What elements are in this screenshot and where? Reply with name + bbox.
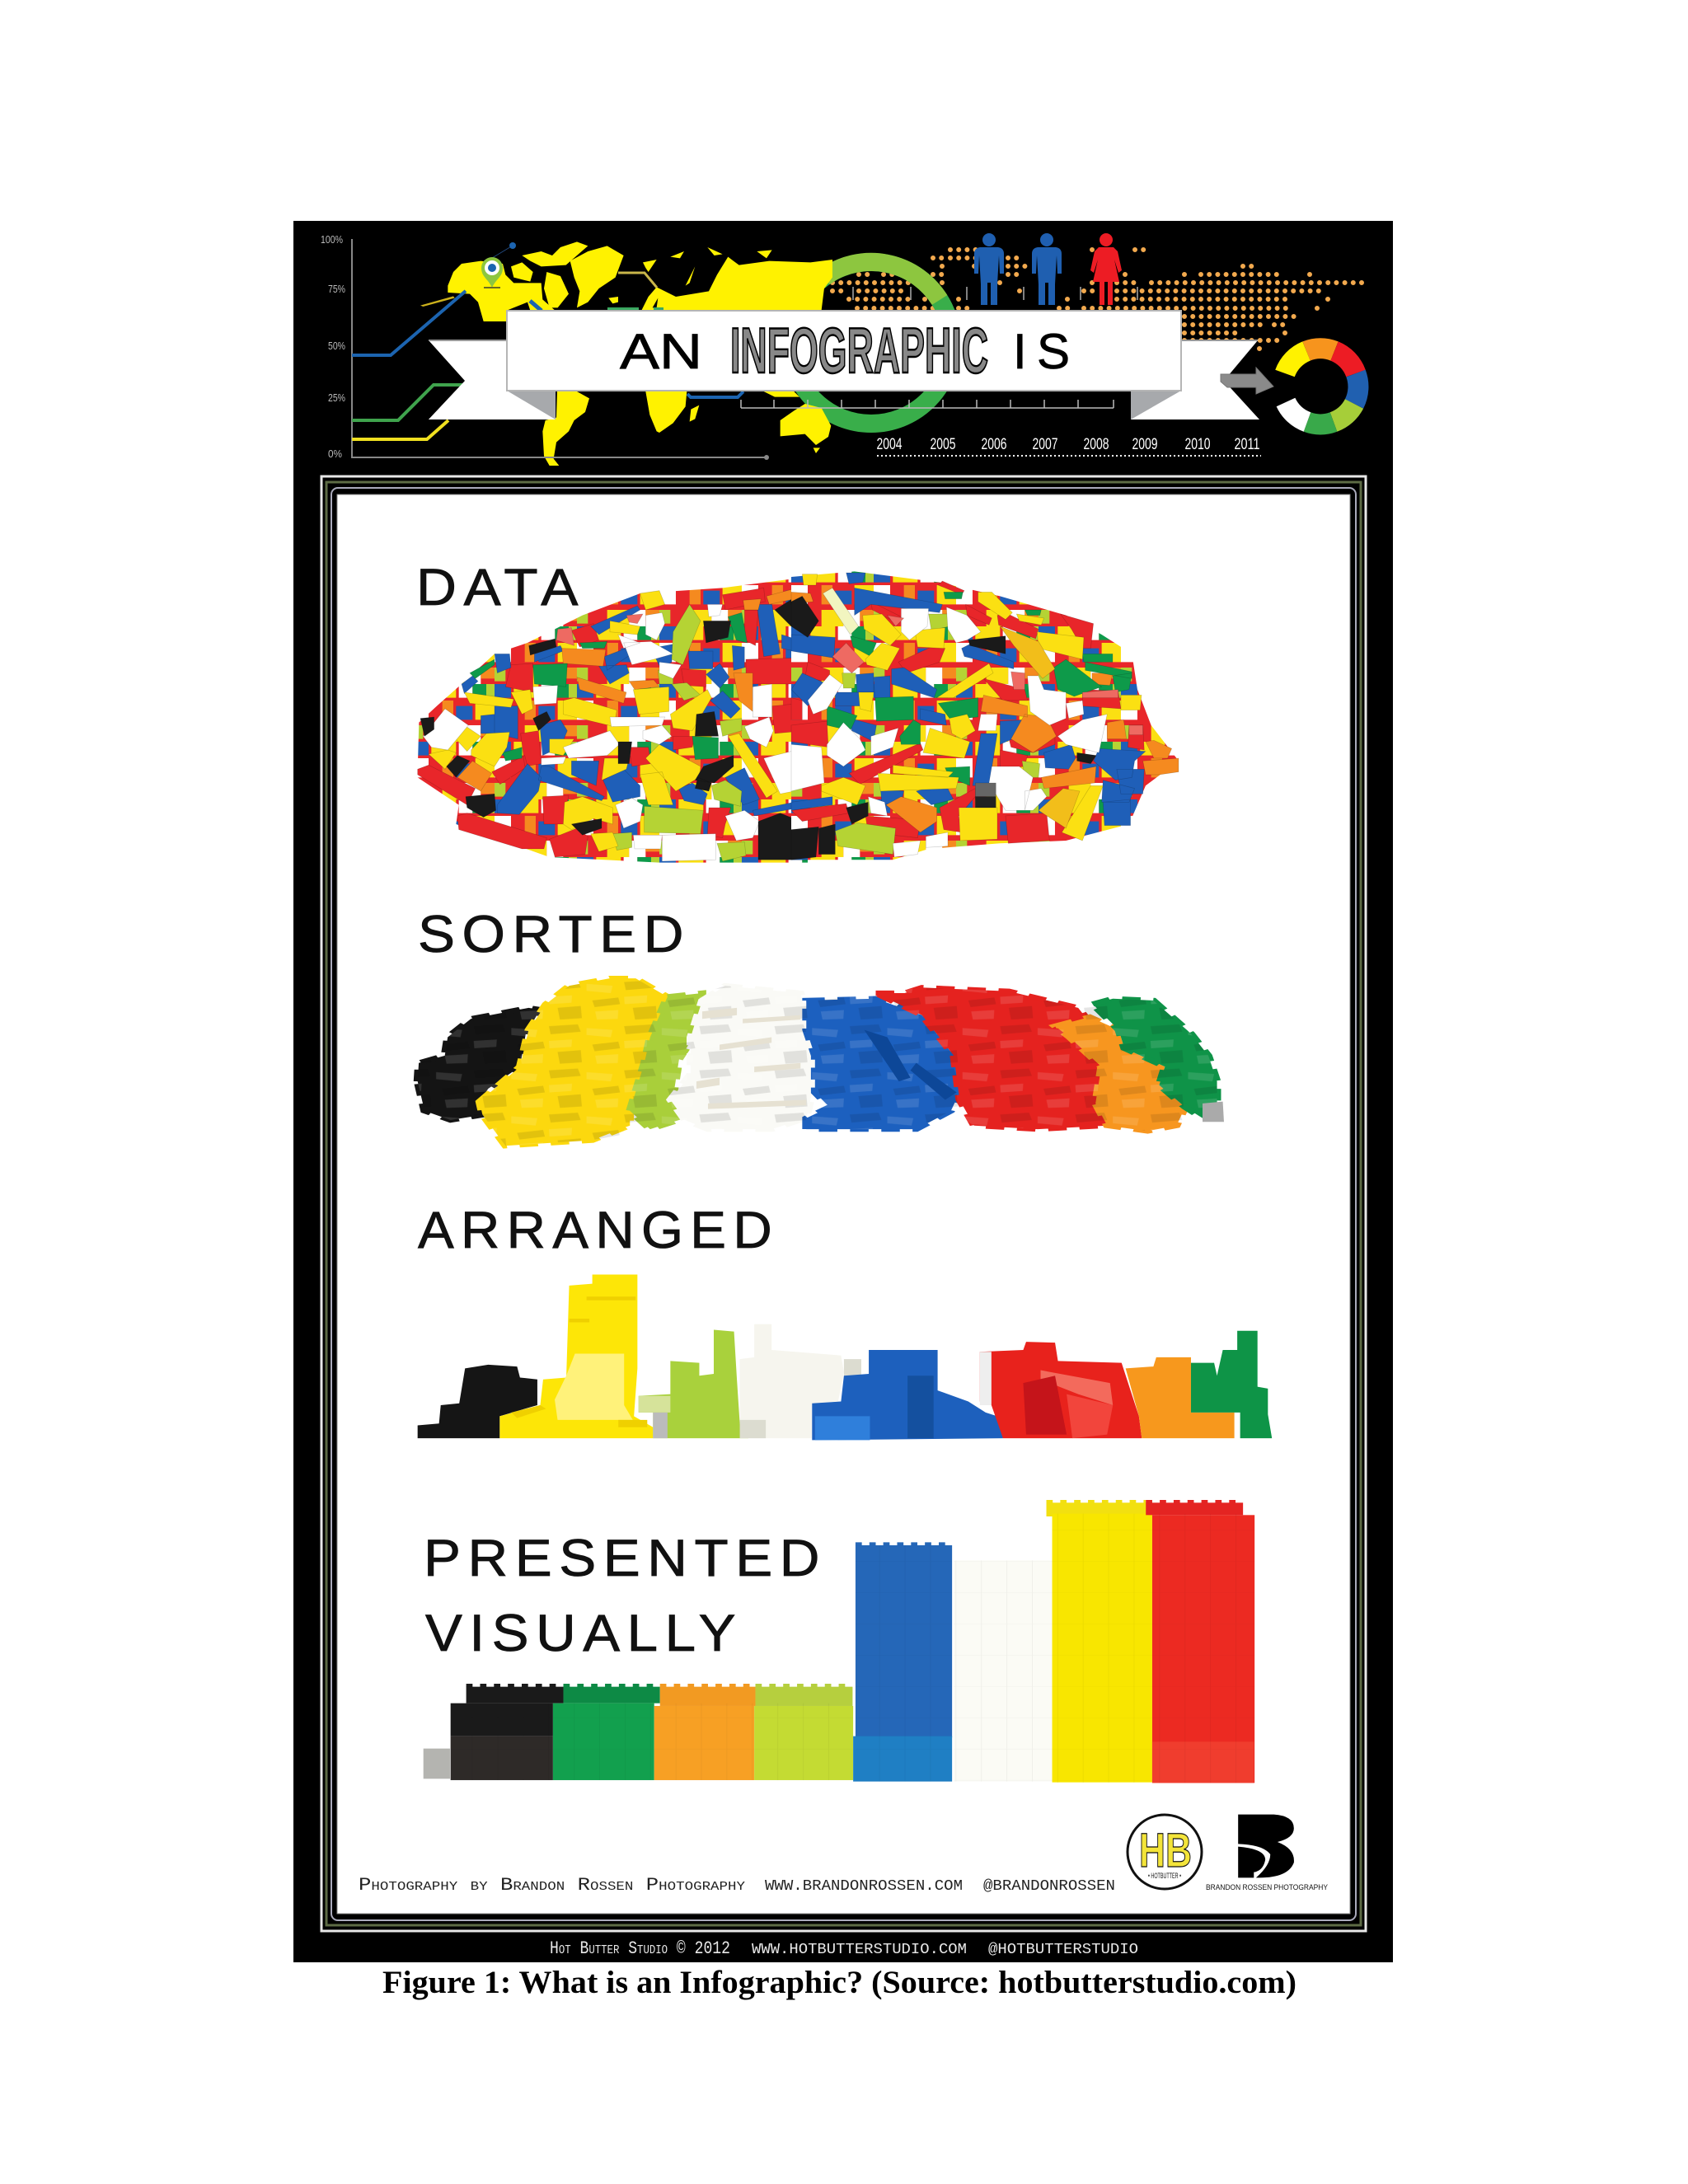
y axis labels: 0% (328, 448, 342, 460)
framed white panel (321, 476, 1366, 1931)
figure caption: Figure 1: What is an Infographic? (Source: hotbutterstudio.com) (382, 1965, 1296, 2000)
heading: data: DATA (416, 559, 585, 616)
coloured line chart (352, 239, 1137, 460)
title: an infographic is (620, 314, 1070, 387)
header graphic (321, 233, 1365, 466)
map pin (481, 242, 516, 288)
year labels: 2005 (930, 436, 956, 453)
lime stack (639, 1329, 748, 1438)
year labels: 2011 (1235, 436, 1259, 453)
lime bricks (630, 993, 702, 1129)
y axis labels: 100% (321, 233, 343, 246)
green ring chart (790, 262, 952, 424)
black stack (418, 1365, 537, 1438)
logo: brandon rossen photography: BRANDON ROSSEN PHOTOGRAPHY (1206, 1883, 1329, 1892)
studio credit line: Hot Butter Studio © 2012 (550, 1938, 730, 1959)
black bricks (418, 1008, 540, 1120)
brick seams (451, 1514, 1254, 1783)
red bricks (875, 987, 1107, 1129)
heading: presented visually: PRESENTED (424, 1530, 827, 1587)
studio credit line: WWW.HOTBUTTERSTUDIO.COM (752, 1942, 967, 1958)
left half of pile (418, 577, 808, 863)
blue stack (812, 1350, 1003, 1440)
green stack (1191, 1331, 1272, 1438)
bar chart built from bricks (424, 1502, 1254, 1783)
grey brick (1203, 1102, 1224, 1122)
year labels (877, 436, 1259, 453)
y axis labels: 75% (328, 283, 345, 295)
red stack (980, 1342, 1142, 1438)
donut chart (1285, 349, 1358, 424)
red bar (1146, 1502, 1254, 1783)
dark and light plates (864, 1030, 957, 1099)
year labels: 2008 (1083, 436, 1109, 453)
year labels: 2009 (1132, 436, 1157, 453)
photography credit line: Photography by Brandon Rossen Photography (359, 1875, 745, 1896)
y axis labels: 25% (328, 391, 345, 404)
black poster background (293, 221, 1393, 1962)
bricks arranged by colour (418, 1274, 1272, 1440)
blue bricks (806, 999, 959, 1129)
year labels: 2006 (981, 436, 1007, 453)
brick pile: unsorted data (418, 571, 1179, 863)
blue bar (853, 1545, 952, 1782)
heading: sorted: SORTED (418, 906, 691, 963)
title: an infographic is: INFOGRAPHIC (730, 314, 988, 387)
white brick shading (696, 1008, 806, 1109)
grey bar (424, 1749, 450, 1779)
photography credit line: @BRANDONROSSEN (983, 1878, 1115, 1895)
yellow bricks (480, 978, 668, 1146)
title: an infographic is: IS (1013, 324, 1070, 379)
title: an infographic is: AN (620, 324, 702, 379)
heading: presented visually (424, 1530, 827, 1662)
people icons (974, 233, 1122, 305)
ribbon banner (429, 311, 1259, 419)
year labels: 2007 (1032, 436, 1058, 453)
grey arrow (1221, 368, 1273, 394)
year labels: 2004 (877, 436, 903, 453)
y axis labels: 50% (328, 340, 345, 352)
dotted timeline rule (877, 455, 1261, 457)
logo: hot butter: • HOTBUTTER • (1148, 1872, 1181, 1880)
photography credit line (359, 1875, 1115, 1896)
heading: arranged: ARRANGED (418, 1202, 779, 1259)
logo: hot butter: HB (1139, 1824, 1192, 1877)
photography credit line: WWW.BRANDONROSSEN.COM (765, 1878, 963, 1895)
year labels: 2010 (1185, 436, 1210, 453)
orange bar (654, 1687, 756, 1780)
yellow stack (499, 1274, 653, 1438)
world map in yellow, upper part (420, 241, 832, 321)
heading: presented visually: VISUALLY (425, 1605, 743, 1662)
yellow bar (1047, 1502, 1152, 1783)
black bar (451, 1687, 564, 1780)
logo: brandon rossen photography (1206, 1815, 1329, 1892)
green bricks (1093, 999, 1217, 1118)
logo: hot butter (1128, 1815, 1202, 1889)
white stack (740, 1324, 861, 1438)
white bricks (670, 986, 815, 1129)
world map in yellow, lower part (542, 391, 831, 466)
orange stack (1126, 1357, 1235, 1438)
white bar (954, 1560, 1053, 1782)
y axis labels (321, 233, 345, 460)
timeline axis (741, 400, 1114, 408)
studio credit line: @HOTBUTTERSTUDIO (988, 1942, 1138, 1958)
orange dot map (832, 250, 1365, 349)
brick pile: sorted by colour (418, 978, 1224, 1146)
lime bar (754, 1687, 853, 1780)
brick texture (418, 978, 1217, 1146)
brick studs (467, 1502, 1243, 1685)
right half of pile (791, 571, 1179, 860)
orange bricks (1055, 1017, 1185, 1131)
green bar (553, 1687, 660, 1780)
studio credit line (550, 1938, 1138, 1959)
